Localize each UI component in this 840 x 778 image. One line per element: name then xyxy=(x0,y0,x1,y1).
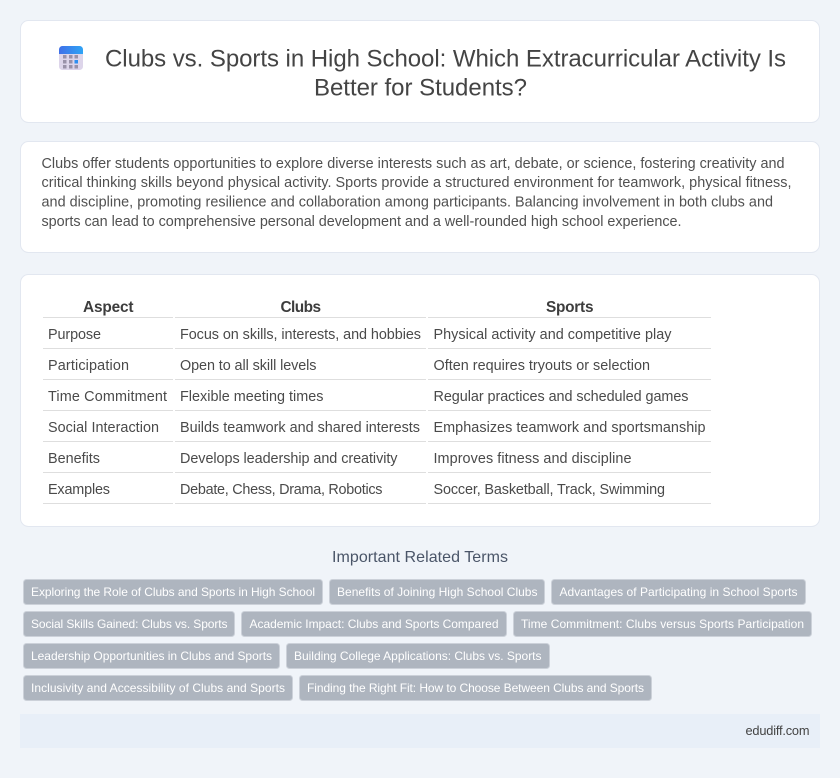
tag: Inclusivity and Accessibility xyxy=(24,676,292,700)
table row: Purpose: Purpose xyxy=(48,327,101,343)
related terms tags xyxy=(24,580,812,700)
table row: Benefits: Benefits xyxy=(48,451,100,467)
table row: Participation: Participation xyxy=(48,358,129,374)
tag: Leadership Opportunities: Leadership Opportunities in Clubs and Sports xyxy=(31,649,272,663)
text block: introduction paragraph: and discipline, promoting resilience and collaboration among participants. Balancing involvement in both clubs and xyxy=(42,195,773,211)
tag: Time Commitment xyxy=(514,612,812,636)
tag: Time Commitment: Time Commitment: Clubs versus Sports Participation xyxy=(521,617,804,631)
text block: introduction paragraph xyxy=(42,156,792,230)
tag: Benefits of Joining: Benefits of Joining High School Clubs xyxy=(337,585,538,599)
table row: Social Interaction: Social Interaction xyxy=(48,420,159,436)
tag: Building College Applications xyxy=(286,644,550,668)
tag: Inclusivity and Accessibility: Inclusivity and Accessibility of Clubs and Sports xyxy=(31,681,285,695)
table row: Social Interaction: Builds teamwork and shared interests xyxy=(180,420,420,436)
icon: calendar xyxy=(59,46,83,70)
tag: Academic Impact xyxy=(242,612,506,636)
tag: Leadership Opportunities xyxy=(24,644,280,668)
text block: introduction paragraph: Clubs offer students opportunities to explore diverse interests such as art, debate, or science, fostering creativity and xyxy=(42,156,784,172)
table row: Social Interaction xyxy=(43,420,711,442)
table row: Participation: Often requires tryouts or selection xyxy=(434,358,650,374)
heading: Important Related Terms: Important Related Terms xyxy=(332,549,508,566)
tag: Exploring the Role: Exploring the Role of Clubs and Sports in High School xyxy=(31,585,315,599)
tag: Finding the Right Fit xyxy=(300,676,652,700)
tag: Building College Applications: Building College Applications: Clubs vs. Sports xyxy=(294,649,542,663)
table row: Time Commitment: Time Commitment xyxy=(48,389,167,405)
table row: Purpose: Focus on skills, interests, and hobbies xyxy=(180,327,421,343)
table row: Benefits: Improves fitness and discipline xyxy=(434,451,632,467)
title xyxy=(105,46,786,102)
table row: Purpose xyxy=(43,327,711,349)
table row: Examples: Examples xyxy=(48,482,110,498)
table header xyxy=(43,299,711,318)
table row: Purpose: Physical activity and competitive play xyxy=(434,327,672,343)
table row: Participation: Open to all skill levels xyxy=(180,358,316,374)
tag: Social Skills xyxy=(24,612,234,636)
title: Better for Students? xyxy=(314,74,527,102)
tag: Benefits of Joining xyxy=(330,580,544,604)
table row: Examples xyxy=(43,482,711,504)
panel: comparison table xyxy=(20,274,820,526)
tag: Advantages: Advantages of Participating in School Sports xyxy=(560,585,798,599)
table header: Aspect xyxy=(83,299,134,316)
text block: introduction paragraph: sports can lead to comprehensive personal development and a well-rounded high school experience. xyxy=(42,214,682,230)
title: Clubs vs. Sports in High School: Which Extracurricular Activity Is xyxy=(105,46,786,72)
panel: introduction xyxy=(20,142,820,252)
text block: introduction paragraph: critical thinking skills beyond physical activity. Sports provide a structured environment for teamwork, physical fitness, xyxy=(42,175,792,191)
table row: Benefits xyxy=(43,451,711,473)
panel: header xyxy=(20,20,820,122)
table row: Social Interaction: Emphasizes teamwork and sportsmanship xyxy=(434,420,706,436)
table header: Clubs xyxy=(280,299,321,316)
table row: Examples: Soccer, Basketball, Track, Swimming xyxy=(434,482,665,498)
table row: Time Commitment: Regular practices and scheduled games xyxy=(434,389,688,405)
table row: Examples: Debate, Chess, Drama, Robotics xyxy=(180,482,382,498)
table row: Time Commitment xyxy=(43,389,711,411)
table row: Benefits: Develops leadership and creativity xyxy=(180,451,398,467)
table row: Participation xyxy=(43,358,711,380)
tag: Advantages xyxy=(552,580,806,604)
tag: Finding the Right Fit: Finding the Right Fit: How to Choose Between Clubs and Sports xyxy=(307,681,644,695)
table row: Time Commitment: Flexible meeting times xyxy=(180,389,324,405)
tag: Social Skills: Social Skills Gained: Clubs vs. Sports xyxy=(31,617,228,631)
tag: Exploring the Role xyxy=(24,580,322,604)
footer xyxy=(20,714,820,748)
table header: Sports xyxy=(546,299,594,316)
tag: Academic Impact: Academic Impact: Clubs and Sports Compared xyxy=(250,617,498,631)
footer: edudiff.com xyxy=(746,723,810,738)
